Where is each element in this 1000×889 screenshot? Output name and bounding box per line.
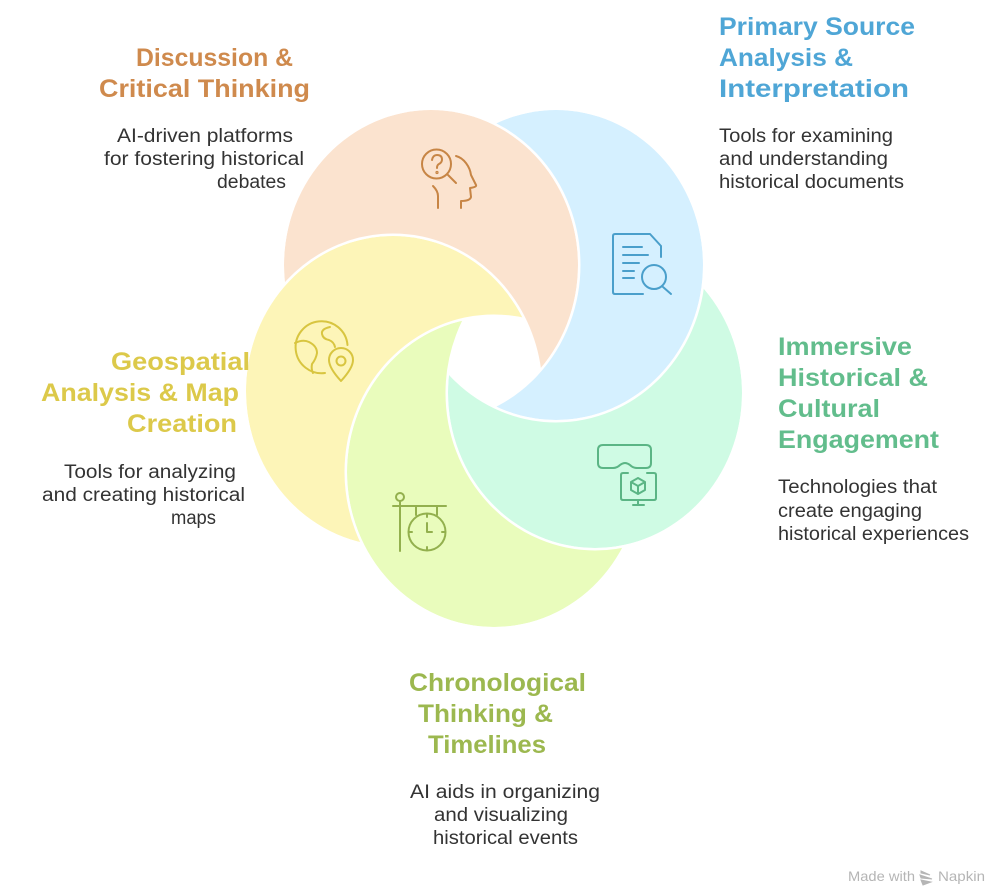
heading: chronological: Timelines (428, 731, 546, 759)
heading: discussion: Discussion & (136, 44, 293, 72)
heading: immersive (778, 333, 940, 454)
text: immersive description: Technologies that (778, 477, 938, 498)
text: immersive description (778, 477, 969, 545)
text: chronological description: AI aids in organizing (410, 782, 600, 803)
icon: hanging clock (393, 493, 446, 551)
heading: chronological: Chronological (409, 669, 586, 697)
text: geospatial description (42, 462, 245, 529)
icon: globe with location pin (295, 321, 353, 381)
text: geospatial description: maps (171, 508, 216, 529)
text: chronological description: and visualizing (434, 805, 568, 826)
heading: primary source (719, 13, 915, 103)
heading: primary source: Interpretation (719, 75, 909, 103)
text: geospatial description: and creating historical (42, 485, 245, 506)
icon: head with question magnifier (422, 150, 476, 208)
text: discussion description: for fostering historical (104, 149, 304, 170)
heading: immersive: Immersive (778, 333, 912, 361)
heading: discussion (99, 44, 310, 103)
panel: primary source crescent (496, 110, 703, 420)
heading: geospatial: Geospatial (111, 348, 250, 376)
text: chronological description: historical events (433, 828, 578, 849)
text: immersive description: historical experiences (778, 524, 969, 545)
panel: discussion crescent (284, 110, 578, 368)
icon: document with magnifier (613, 234, 671, 294)
text: discussion description (104, 126, 304, 193)
panel: geospatial crescent (246, 236, 540, 546)
icon: VR headset and monitor with cube (598, 445, 656, 505)
heading: chronological: Thinking & (418, 700, 553, 728)
heading: geospatial: Analysis & Map (41, 379, 239, 407)
text: immersive description: create engaging (778, 501, 922, 522)
heading: immersive: Historical & (778, 364, 928, 392)
text: primary source description (719, 126, 904, 193)
heading: primary source: Primary Source (719, 13, 915, 41)
text: primary source description: historical documents (719, 172, 904, 193)
heading: geospatial: Creation (127, 410, 237, 438)
heading: immersive: Engagement (778, 426, 940, 454)
heading: immersive: Cultural (778, 395, 880, 423)
text: geospatial description: Tools for analyzing (64, 462, 236, 483)
panel: chronological crescent (347, 317, 641, 627)
text: discussion description: debates (217, 172, 286, 193)
heading: primary source: Analysis & (719, 44, 853, 72)
text: discussion description: AI-driven platforms (117, 126, 293, 147)
text: primary source description: and understanding (719, 149, 888, 170)
footer: made with Napkin: Made with (848, 868, 915, 884)
text: chronological description (410, 782, 600, 849)
panel: immersive crescent (448, 289, 742, 548)
heading: discussion: Critical Thinking (99, 75, 310, 103)
text: primary source description: Tools for examining (719, 126, 893, 147)
heading: geospatial (41, 348, 250, 438)
footer: made with Napkin (848, 868, 985, 885)
footer: made with Napkin: Napkin (938, 868, 985, 884)
heading: chronological (409, 669, 586, 759)
